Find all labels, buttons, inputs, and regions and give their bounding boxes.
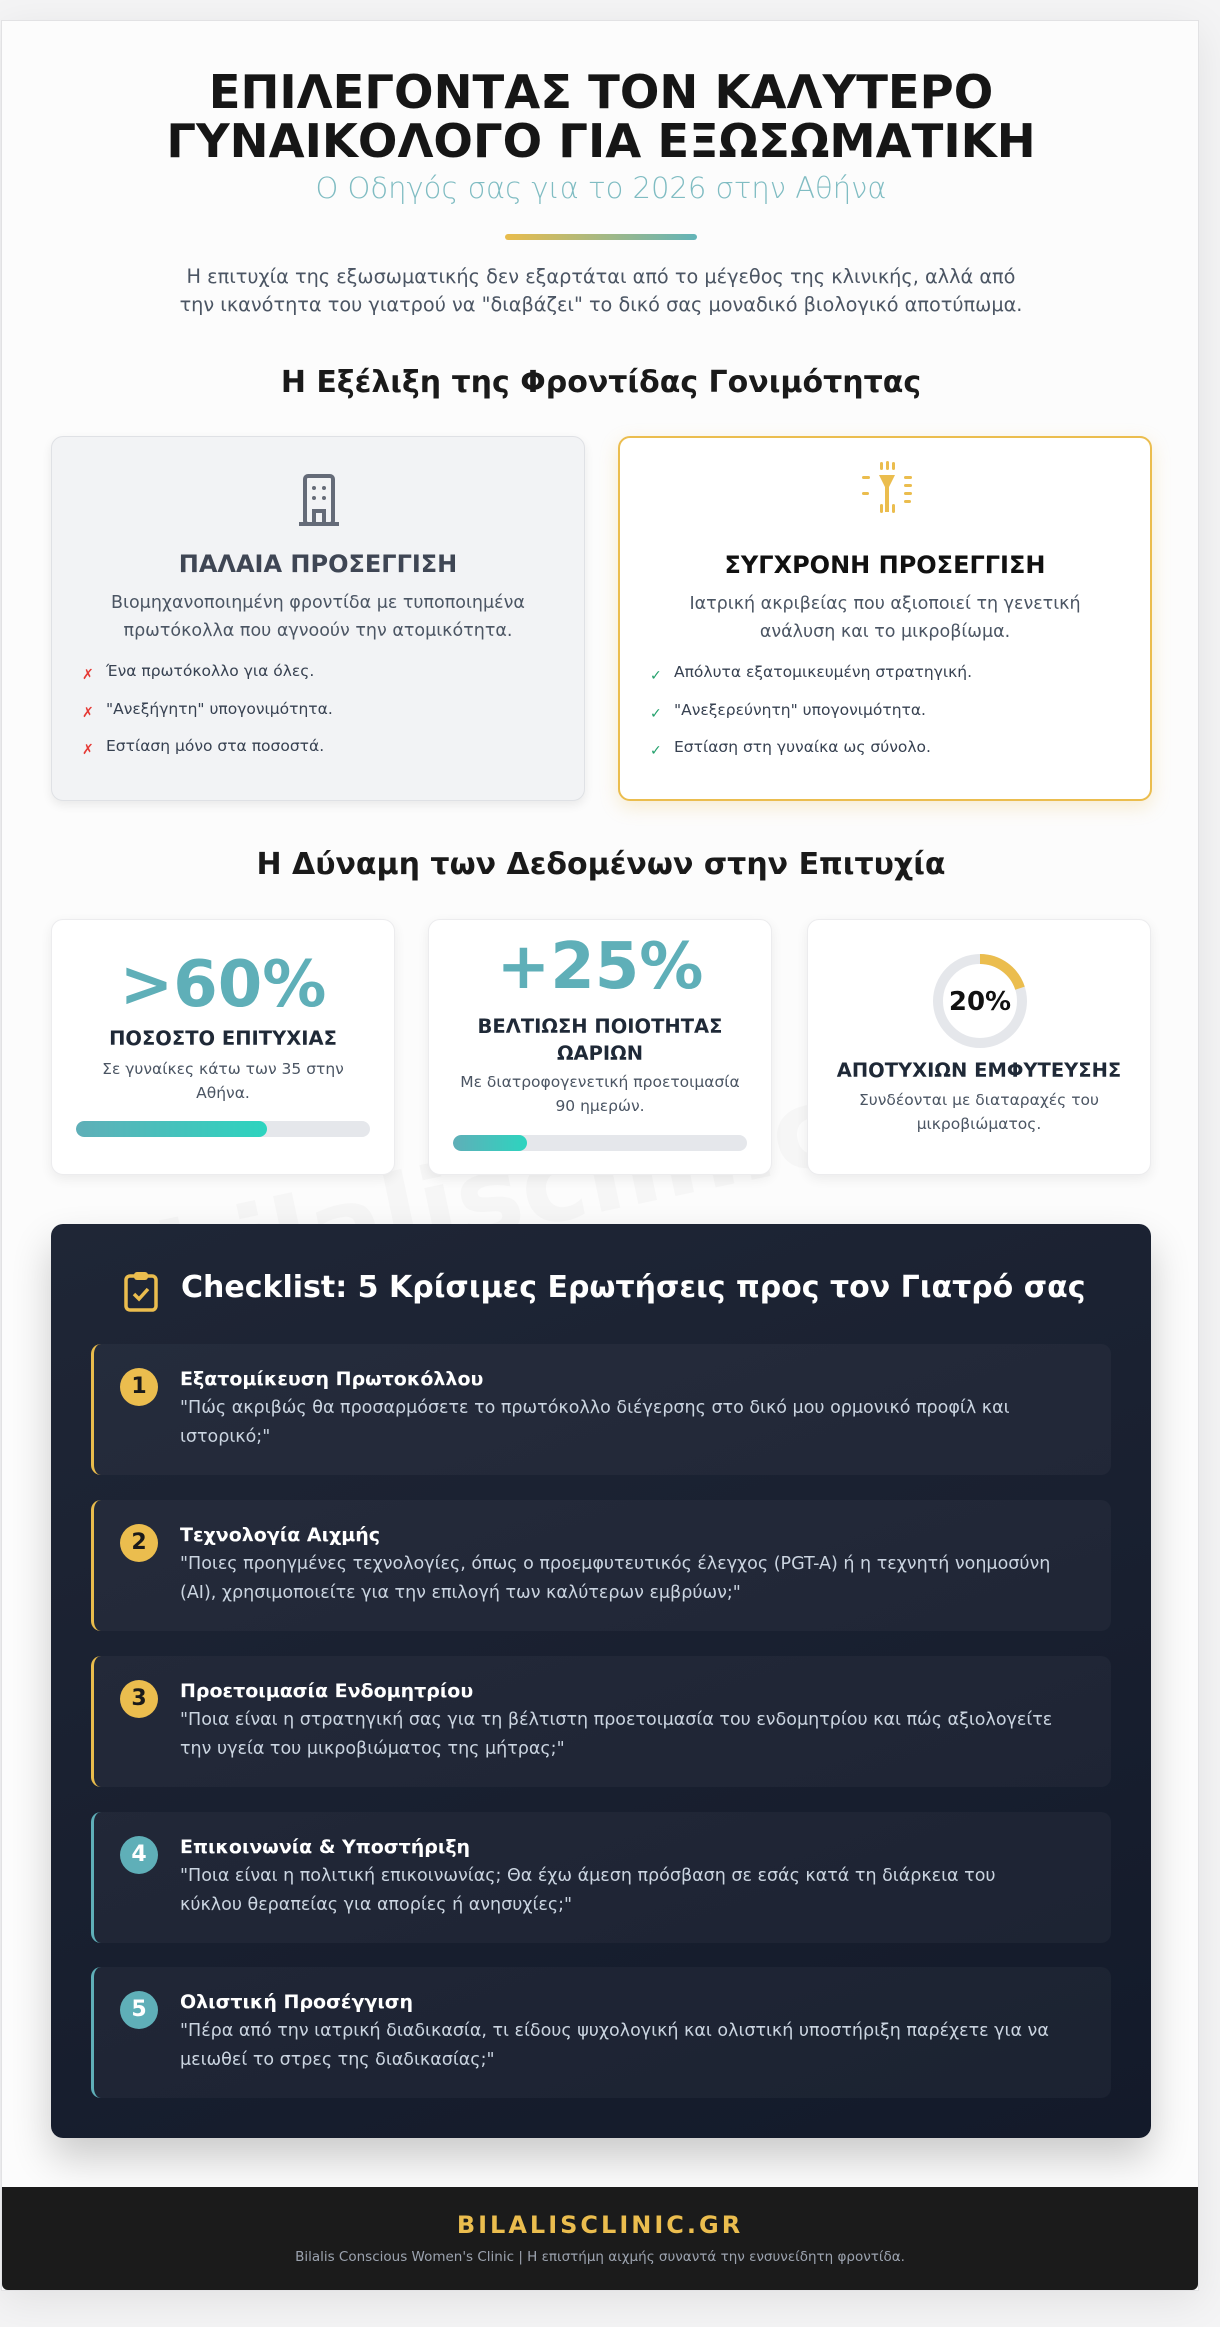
subtitle: Ο Οδηγός σας για το 2026 στην Αθήνα: [316, 171, 886, 205]
stat card 1: >60%: [120, 948, 326, 1022]
bullet list: ✓: [650, 706, 662, 722]
bullet list: Εστίαση στη γυναίκα ως σύνολο.: [674, 738, 931, 756]
item 5: 5: [131, 1997, 147, 2022]
item 2: 2: [131, 1530, 147, 1555]
bullet list: ✗: [82, 667, 94, 683]
item 1: "Πώς ακριβώς θα προσαρμόσετε το πρωτόκολλο διέγερσης στο δικό μου ορμονικό προφίλ και ιστορικό;": [180, 1398, 1010, 1447]
stat card 3: ΑΠΟΤΥΧΙΩΝ ΕΜΦΥΤΕΥΣΗΣ: [837, 1059, 1121, 1082]
bullet list: [82, 662, 333, 758]
watermark: bilalisclinic: [146, 1061, 849, 1329]
bullet list: ✓: [650, 668, 662, 684]
stat card 1: [51, 919, 395, 1175]
item 4: "Ποια είναι η πολιτική επικοινωνίας; Θα έχω άμεση πρόσβαση σε εσάς κατά τη διάρκεια του κύκλου θεραπείας για απορίες ή ανησυχίες;": [180, 1866, 996, 1915]
stat card 2: Με διατροφογενετική προετοιμασία 90 ημερών.: [460, 1073, 740, 1115]
bullet list: Εστίαση μόνο στα ποσοστά.: [106, 737, 324, 755]
item 1: 1: [131, 1374, 147, 1399]
bullet list: Απόλυτα εξατομικευμένη στρατηγική.: [674, 663, 972, 681]
bullet list: ✗: [82, 742, 94, 758]
item 4: 4: [131, 1842, 147, 1867]
item 1: Εξατομίκευση Πρωτοκόλλου: [180, 1368, 483, 1390]
panel: modern approach: [618, 436, 1152, 801]
title: ΕΠΙΛΕΓΟΝΤΑΣ ΤΟΝ ΚΑΛΥΤΕΡΟ: [209, 65, 993, 119]
bullet list: ✓: [650, 743, 662, 759]
item 1: [91, 1344, 1111, 1475]
stat card 3: [807, 919, 1151, 1175]
bullet list: ✗: [82, 704, 94, 720]
title: ΓΥΝΑΙΚΟΛΟΓΟ ΓΙΑ ΕΞΩΣΩΜΑΤΙΚΗ: [166, 114, 1036, 168]
icon: clipboard: [124, 1272, 158, 1312]
icon: building: [299, 474, 339, 526]
description: Βιομηχανοποιημένη φροντίδα με τυποποιημένα πρωτόκολλα που αγνοούν την ατομικότητα.: [111, 593, 525, 641]
bullet list: "Ανεξήγητη" υπογονιμότητα.: [106, 700, 333, 718]
stat card 2: [428, 919, 772, 1175]
item 2: "Ποιες προηγμένες τεχνολογίες, όπως ο προεμφυτευτικός έλεγχος (PGT-A) ή η τεχνητή νοημοσύνη (AI), χρησιμοποιείτε για την επιλογή των καλύτερων εμβρύων;": [180, 1554, 1050, 1603]
stat card 2: +25%: [497, 930, 703, 1004]
item 5: Ολιστική Προσέγγιση: [180, 1991, 413, 2013]
footer: [2, 2187, 1198, 2290]
progress bar: [453, 1135, 747, 1151]
title: [166, 65, 1036, 168]
stat card 1: Σε γυναίκες κάτω των 35 στην Αθήνα.: [102, 1060, 344, 1102]
donut chart: 20%: [949, 987, 1011, 1017]
heading: ΣΥΓΧΡΟΝΗ ΠΡΟΣΕΓΓΙΣΗ: [725, 551, 1045, 579]
item 4: [91, 1812, 1111, 1943]
panel: checklist: [51, 1224, 1151, 2138]
stat card 2: ΒΕΛΤΙΩΣΗ ΠΟΙΟΤΗΤΑΣ: [478, 1015, 722, 1038]
footer brand: BILALISCLINIC.GR: [457, 2211, 743, 2239]
item 2: [91, 1500, 1111, 1631]
heading: evolution: Η Εξέλιξη της Φροντίδας Γονιμότητας: [281, 365, 921, 400]
item 3: "Ποια είναι η στρατηγική σας για τη βέλτιστη προετοιμασία του ενδομητρίου και πώς αξιολογείτε την υγεία του μικροβιώματος της μήτρας;": [180, 1710, 1052, 1759]
item 3: Προετοιμασία Ενδομητρίου: [180, 1680, 473, 1702]
stat card 3: Συνδέονται με διαταραχές του μικροβιώματος.: [859, 1091, 1099, 1133]
icon: precision: [862, 461, 912, 513]
item 5: "Πέρα από την ιατρική διαδικασία, τι είδους ψυχολογική και ολιστική υποστήριξη παρέχετε για να μειωθεί το στρες της διαδικασίας;": [180, 2021, 1049, 2070]
item 2: Τεχνολογία Αιχμής: [180, 1524, 380, 1546]
item 4: Επικοινωνία & Υποστήριξη: [180, 1836, 470, 1858]
panel: old approach: [51, 436, 585, 801]
bullet list: "Ανεξερεύνητη" υπογονιμότητα.: [674, 700, 926, 718]
intro text: την ικανότητα του γιατρού να "διαβάζει" το δικό σας μοναδικό βιολογικό αποτύπωμα.: [180, 293, 1022, 316]
intro text: [180, 265, 1022, 316]
item 5: [91, 1967, 1111, 2098]
footer tagline: Bilalis Conscious Women's Clinic | Η επιστήμη αιχμής συναντά την ενσυνείδητη φροντίδα.: [295, 2249, 905, 2265]
donut chart: [933, 954, 1027, 1048]
item 3: [91, 1656, 1111, 1787]
progress bar: [76, 1121, 370, 1137]
gradient divider: [505, 234, 697, 240]
stat card 1: ΠΟΣΟΣΤΟ ΕΠΙΤΥΧΙΑΣ: [109, 1027, 337, 1050]
item 3: 3: [131, 1686, 147, 1711]
heading: data: Η Δύναμη των Δεδομένων στην Επιτυχία: [256, 847, 946, 882]
intro text: Η επιτυχία της εξωσωματικής δεν εξαρτάται από το μέγεθος της κλινικής, αλλά από: [187, 265, 1015, 288]
bullet list: Ένα πρωτόκολλο για όλες.: [106, 662, 314, 680]
checklist heading: Checklist: 5 Κρίσιμες Ερωτήσεις προς τον Γιατρό σας: [181, 1270, 1086, 1305]
description: Ιατρική ακριβείας που αξιοποιεί τη γενετική ανάλυση και το μικροβίωμα.: [689, 594, 1081, 642]
stat card 2: ΩΑΡΙΩΝ: [557, 1042, 643, 1065]
bullet list: [650, 663, 972, 759]
heading: ΠΑΛΑΙΑ ΠΡΟΣΕΓΓΙΣΗ: [179, 550, 457, 578]
